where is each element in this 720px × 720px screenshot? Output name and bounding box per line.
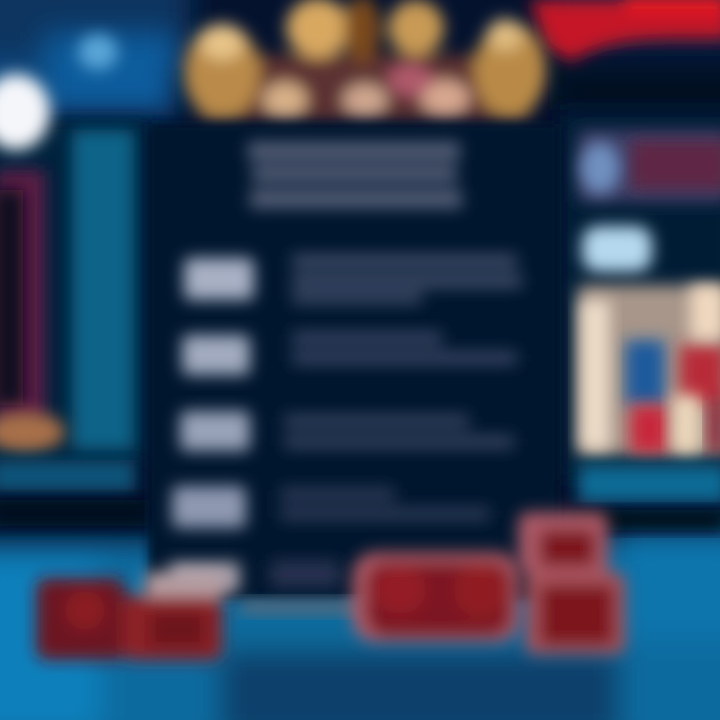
row 4 <box>172 486 490 528</box>
gold ornaments top <box>184 0 546 120</box>
row 5 <box>170 560 340 592</box>
small blue light <box>78 34 118 70</box>
red dice centre <box>352 552 520 642</box>
white light <box>0 74 50 150</box>
row 2 <box>182 332 517 375</box>
red banner top right <box>530 0 720 62</box>
title <box>248 142 462 208</box>
bottom edge of panel <box>240 600 370 614</box>
left side panel <box>0 120 150 526</box>
red dice left <box>36 572 225 660</box>
row 1 <box>184 255 522 303</box>
red dice right <box>518 512 625 654</box>
background: top band <box>0 0 720 120</box>
right side panel <box>560 110 720 530</box>
row 3 <box>180 411 514 451</box>
central dark panel <box>148 124 558 600</box>
background: lower blue floor <box>0 530 720 720</box>
